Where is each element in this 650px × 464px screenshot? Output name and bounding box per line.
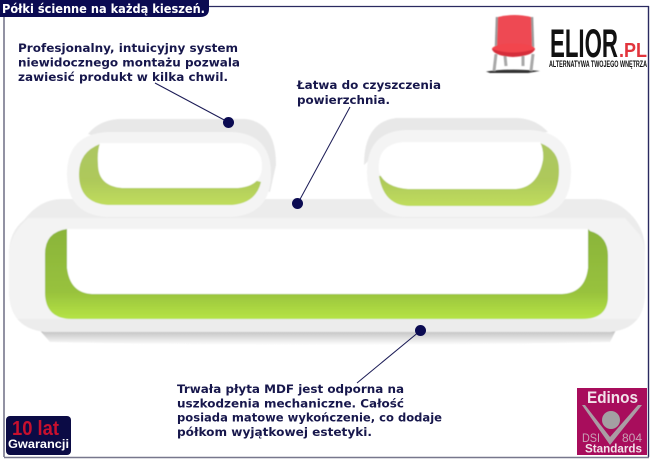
badge: 10 years warranty: Gwarancji (8, 437, 69, 451)
callout text: powierzchnia. (297, 93, 390, 107)
callout text: półkom wyjątkowej estetyki. (177, 425, 372, 439)
callout text (18, 41, 240, 84)
badge: 10 years warranty (6, 416, 71, 455)
badge: Edinos DSI 804 Standards: Edinos (587, 388, 638, 407)
callout text: Trwała płyta MDF jest odporna na (177, 382, 404, 396)
leader line (155, 83, 228, 122)
title banner: Półki ścienne na każdą kieszeń. (2, 2, 205, 16)
marker dot (292, 198, 303, 209)
badge: Edinos DSI 804 Standards: Standards (585, 444, 642, 456)
callout: MDF board (177, 325, 442, 439)
callout text: Łatwa do czyszczenia (296, 78, 441, 92)
icon: red chair (486, 15, 540, 73)
badge: Edinos DSI 804 Standards: DSI (582, 433, 600, 445)
shelf: small left (67, 119, 276, 217)
callout text: Profesjonalny, intuicyjny system (18, 41, 238, 55)
shelf: large (9, 199, 645, 345)
leader line (357, 331, 420, 383)
badge: Edinos DSI 804 Standards: 804 (622, 433, 643, 445)
callout text: posiada matowe wykończenie, co dodaje (177, 410, 442, 424)
logo: Elior.pl (486, 15, 647, 73)
callout text: zawiesić produkt w kilka chwil. (18, 70, 228, 84)
logo: Elior.pl: .PL (619, 40, 647, 62)
leader line (298, 107, 350, 203)
callout text: uszkodzenia mechaniczne. Całość (177, 396, 404, 410)
callout text (296, 78, 441, 107)
callout text (177, 382, 442, 439)
shelf: small right (364, 118, 571, 217)
marker dot (223, 117, 234, 128)
callout: mounting system (18, 41, 240, 128)
marker dot (415, 325, 426, 336)
callout: easy cleaning (292, 78, 441, 209)
badge: 10 years warranty: 10 lat (12, 418, 59, 440)
callout text: niewidocznego montażu pozwala (18, 56, 240, 70)
badge: Edinos DSI 804 Standards (577, 388, 647, 456)
